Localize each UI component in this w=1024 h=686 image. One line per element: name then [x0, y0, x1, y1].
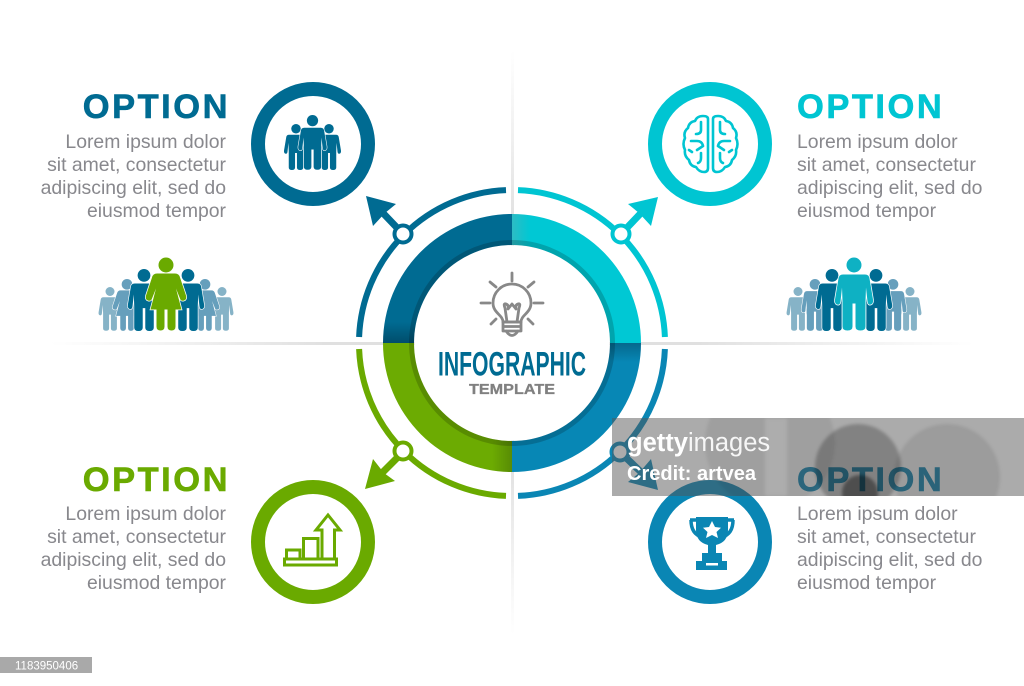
- image id badge: 1183950406: [15, 660, 78, 672]
- outer arc: top right with arrow: [518, 190, 665, 337]
- text block: bottom left: [41, 461, 230, 594]
- option circle: top left, team icon: [258, 89, 368, 199]
- text block: bottom left: OPTION: [83, 461, 230, 499]
- centre title: INFOGRAPHIC: [438, 346, 586, 384]
- centre title: [438, 346, 586, 398]
- inner ring shadow: [412, 242, 612, 444]
- text block: top left: OPTION: [83, 88, 230, 126]
- watermark band: [612, 418, 1024, 496]
- centre title: TEMPLATE: [469, 381, 555, 398]
- option circle: bottom right, trophy icon: [655, 487, 765, 597]
- text block: bottom right: Lorem ipsum dolor: [797, 503, 958, 525]
- people group: teal man leader: [787, 258, 921, 331]
- text block: top right: [797, 88, 982, 222]
- icon: growth chart: [284, 515, 340, 565]
- text block: top left: [41, 88, 230, 222]
- image id badge: [0, 657, 92, 673]
- text block: top left: sit amet, consectetur: [47, 154, 227, 176]
- text block: top right: OPTION: [797, 88, 944, 126]
- quadrant dividers: [50, 50, 974, 635]
- outer arc: top left with arrow: [359, 190, 506, 337]
- text block: top left: adipiscing elit, sed do: [41, 177, 226, 199]
- text block: top right: adipiscing elit, sed do: [797, 177, 982, 199]
- icon: trophy: [690, 517, 734, 570]
- text block: bottom right: eiusmod tempor: [797, 572, 937, 594]
- text block: top left: Lorem ipsum dolor: [65, 131, 227, 153]
- text block: bottom left: adipiscing elit, sed do: [41, 549, 226, 571]
- text block: bottom left: Lorem ipsum dolor: [65, 503, 227, 525]
- option circle: top right, brain icon: [655, 89, 765, 199]
- people group: green woman leader: [99, 258, 233, 331]
- text block: bottom right: sit amet, consectetur: [797, 526, 976, 548]
- text block: top right: sit amet, consectetur: [797, 154, 976, 176]
- option circle: bottom left, growth chart icon: [258, 487, 368, 597]
- text block: top right: eiusmod tempor: [797, 200, 937, 222]
- text block: bottom left: sit amet, consectetur: [47, 526, 227, 548]
- ring segment: blue: [512, 343, 641, 472]
- icon: team: [284, 115, 341, 170]
- icon: light bulb: [481, 273, 543, 336]
- text block: top left: eiusmod tempor: [87, 200, 227, 222]
- watermark text: gettyimages: [627, 429, 770, 457]
- ring segment: green: [383, 343, 512, 472]
- text block: bottom right: OPTION: [797, 461, 944, 499]
- text block: bottom left: eiusmod tempor: [87, 572, 227, 594]
- centre disc: [414, 246, 610, 440]
- icon: brain: [684, 116, 738, 172]
- watermark band: Credit: artvea: [627, 463, 757, 485]
- text block: bottom right: adipiscing elit, sed do: [797, 549, 982, 571]
- ring segment: dark blue: [383, 214, 512, 343]
- ring segment: cyan: [512, 214, 641, 343]
- watermark abstract shapes: [706, 418, 1000, 496]
- central ring diagram: [383, 214, 641, 472]
- outer arc: bottom right with arrow: [518, 349, 665, 496]
- text block: top right: Lorem ipsum dolor: [797, 131, 958, 153]
- outer arc: bottom left with arrow: [359, 349, 506, 496]
- text block: bottom right: [797, 461, 982, 594]
